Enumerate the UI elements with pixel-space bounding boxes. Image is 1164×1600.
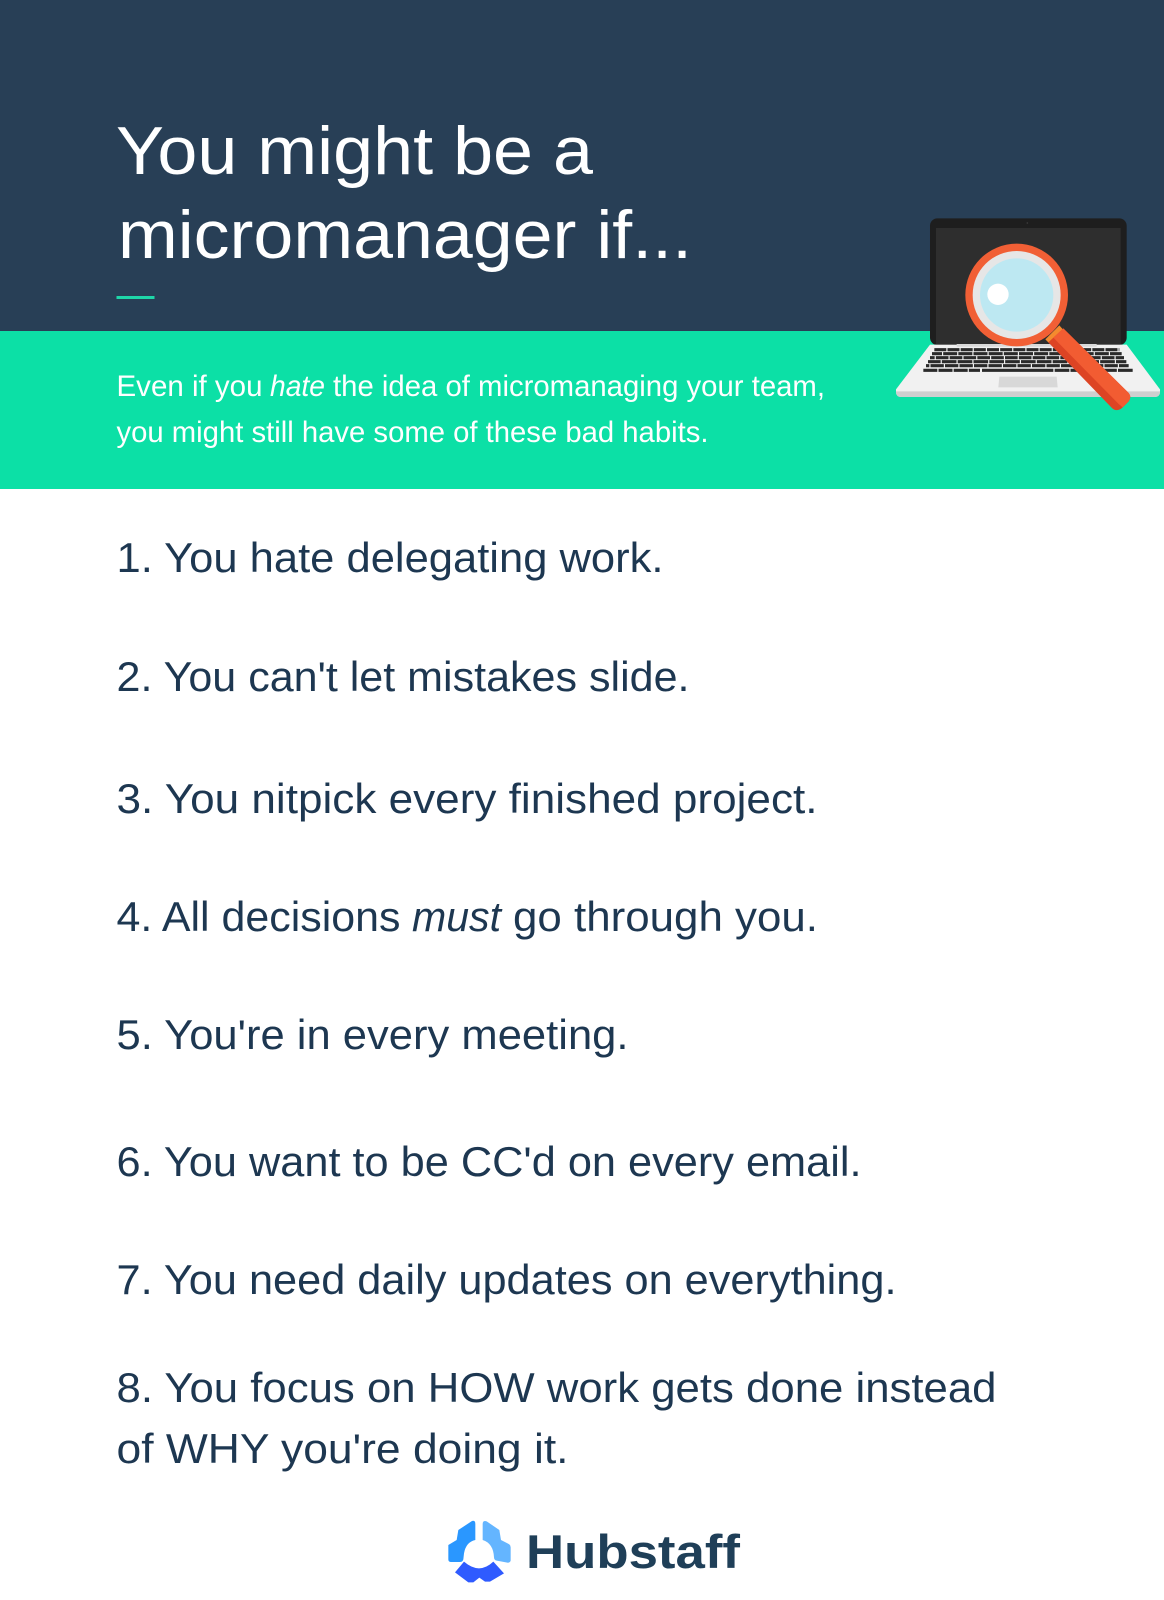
magnifying glass lens [965,244,1068,346]
list item 8 [116,1364,997,1472]
list item 5: 5. You're in every meeting. [116,1011,628,1058]
list item 8: 8. You focus on HOW work gets done instead [116,1364,997,1411]
logo wordmark: Hubstaff [526,1525,740,1578]
laptop keyboard [923,350,1133,370]
title: micromanager if... [118,197,692,273]
list item 2: 2. You can't let mistakes slide. [116,653,690,700]
magnifying glass handle [1045,325,1130,410]
panel: dark header [0,0,1164,332]
list item 4: must [412,893,503,940]
list item 3: 3. You nitpick every finished project. [116,775,818,822]
list item 1: 1. You hate delegating work. [116,534,664,581]
logo: Hubstaff [448,1521,740,1582]
list item 8: of WHY you're doing it. [116,1425,568,1472]
intro text: the idea of micromanaging your team, [333,370,825,403]
list item 4 [116,893,818,940]
title: You might be a [116,113,593,189]
intro text: hate [270,370,325,403]
icon: laptop with magnifying glass [896,218,1160,410]
list item 7: 7. You need daily updates on everything. [116,1256,896,1303]
intro text: Even if you [116,370,262,403]
intro text: you might still have some of these bad habits. [116,416,708,449]
icon: Hubstaff mark [448,1521,511,1582]
laptop screen [930,218,1127,345]
laptop base [896,344,1160,397]
list item 4: go through you. [513,893,818,940]
list item 4: 4. All decisions [116,893,400,940]
intro text [116,370,825,449]
title accent rule [116,296,154,299]
list item 6: 6. You want to be CC'd on every email. [116,1138,862,1185]
panel: green intro band [0,331,1164,489]
title [116,113,692,273]
